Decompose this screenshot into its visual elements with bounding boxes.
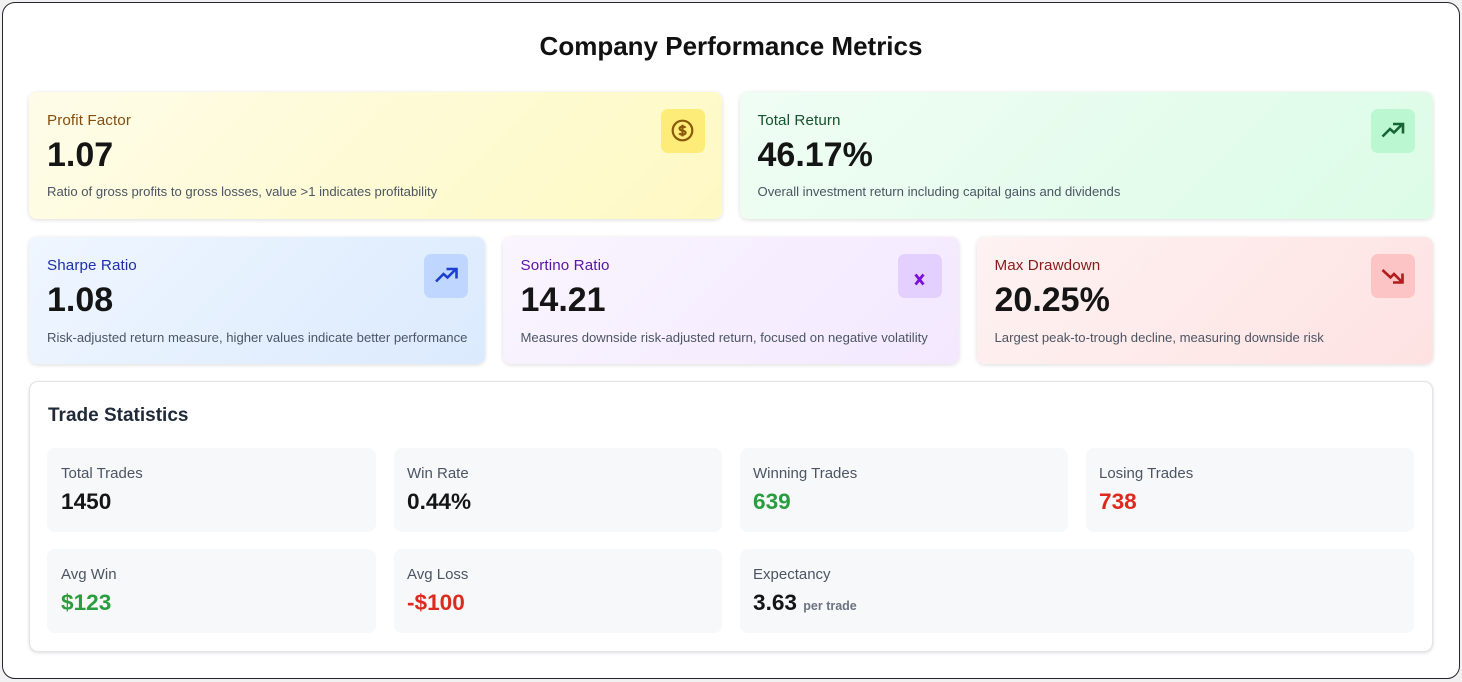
stat: win rate: 0.44%	[407, 489, 471, 514]
panel: sortino ratio	[503, 237, 959, 364]
stat: win rate	[394, 448, 722, 532]
title: Company Performance Metrics	[540, 31, 922, 61]
panel: profit factor	[29, 92, 722, 219]
stat: total trades	[47, 448, 376, 532]
stat: losing trades	[1086, 448, 1414, 532]
icon: trending down	[1371, 254, 1415, 298]
stat: total trades: Total Trades	[61, 465, 143, 482]
value: max drawdown: 20.25%	[994, 280, 1110, 318]
description: sortino ratio: Measures downside risk-adjusted return, focused on negative volatility	[520, 330, 928, 345]
stat: losing trades: 738	[1099, 489, 1137, 514]
description: profit factor: Ratio of gross profits to gross losses, value >1 indicates profitability	[47, 184, 437, 199]
stat: avg win: $123	[61, 590, 111, 615]
value: sortino ratio: 14.21	[520, 280, 606, 318]
panel: max drawdown	[977, 237, 1433, 364]
icon: dollar coin	[661, 109, 705, 153]
panel: sharpe ratio	[29, 237, 485, 364]
description: total return: Overall investment return including capital gains and dividends	[758, 184, 1120, 199]
icon: cross	[898, 254, 942, 298]
stat: winning trades: Winning Trades	[753, 465, 857, 482]
stat: win rate: Win Rate	[407, 465, 469, 482]
stat: avg loss: -$100	[407, 590, 465, 615]
panel: total return	[740, 92, 1433, 219]
stat: winning trades: 639	[753, 489, 791, 514]
panel: trade statistics	[29, 381, 1433, 652]
stat: total trades: 1450	[61, 489, 111, 514]
stat: expectancy: Expectancy	[753, 566, 831, 583]
description: max drawdown: Largest peak-to-trough decline, measuring downside risk	[994, 330, 1324, 345]
heading: trade statistics: Trade Statistics	[48, 405, 188, 426]
icon: trending up	[424, 254, 468, 298]
stat: expectancy: 3.63 per trade	[753, 590, 857, 615]
stat: avg loss: Avg Loss	[407, 566, 468, 583]
description: sharpe ratio: Risk-adjusted return measure, higher values indicate better performance	[47, 330, 467, 345]
stat: avg win: Avg Win	[61, 566, 117, 583]
stat: avg loss	[394, 549, 722, 633]
value: sharpe ratio: 1.08	[47, 280, 113, 318]
label: profit factor: Profit Factor	[47, 112, 131, 129]
stat: expectancy	[740, 549, 1414, 633]
label: sortino ratio: Sortino Ratio	[520, 257, 610, 274]
label: total return: Total Return	[758, 112, 841, 129]
icon: trending up	[1371, 109, 1415, 153]
value: profit factor: 1.07	[47, 136, 113, 174]
label: max drawdown: Max Drawdown	[994, 257, 1100, 274]
value: total return: 46.17%	[758, 136, 873, 174]
stat: avg win	[47, 549, 376, 633]
stat: losing trades: Losing Trades	[1099, 465, 1193, 482]
label: sharpe ratio: Sharpe Ratio	[47, 257, 137, 274]
stat: winning trades	[740, 448, 1068, 532]
